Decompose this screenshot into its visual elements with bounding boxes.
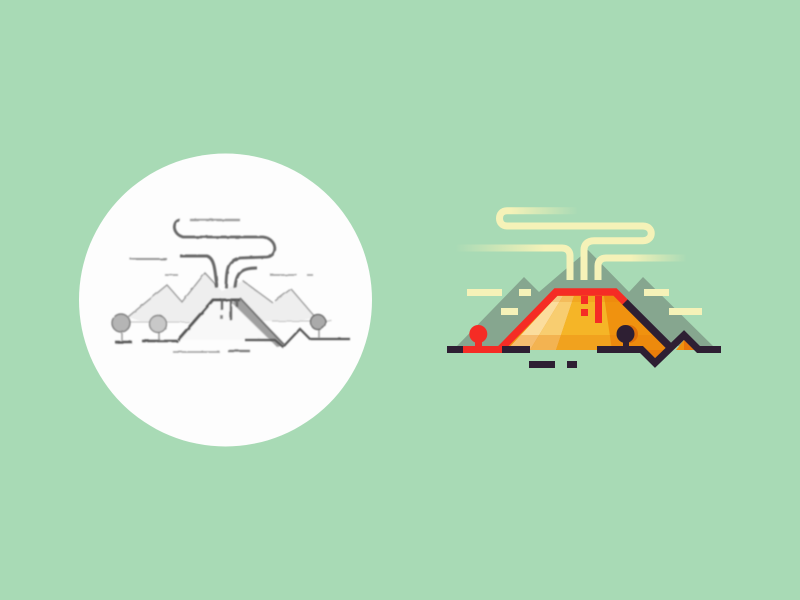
volcano body xyxy=(500,292,672,362)
sketch: ground lines xyxy=(115,329,350,352)
sketch: trees xyxy=(112,314,326,341)
sketch: smoke xyxy=(130,220,313,288)
sketch: volcano xyxy=(178,298,286,347)
clouds xyxy=(467,289,702,315)
icon: dark tree xyxy=(616,325,638,348)
panel: pencil sketch circle xyxy=(79,154,372,446)
smoke trails xyxy=(455,211,687,280)
lava drips xyxy=(581,296,602,323)
red rim xyxy=(500,292,627,350)
sketch: mountains xyxy=(122,273,332,322)
notch fill xyxy=(676,340,684,350)
panel: flat volcano illustration xyxy=(447,211,721,368)
icon: red tree xyxy=(469,325,487,348)
dark slope xyxy=(625,302,671,348)
ground lines xyxy=(447,335,721,368)
mountains xyxy=(457,250,713,346)
